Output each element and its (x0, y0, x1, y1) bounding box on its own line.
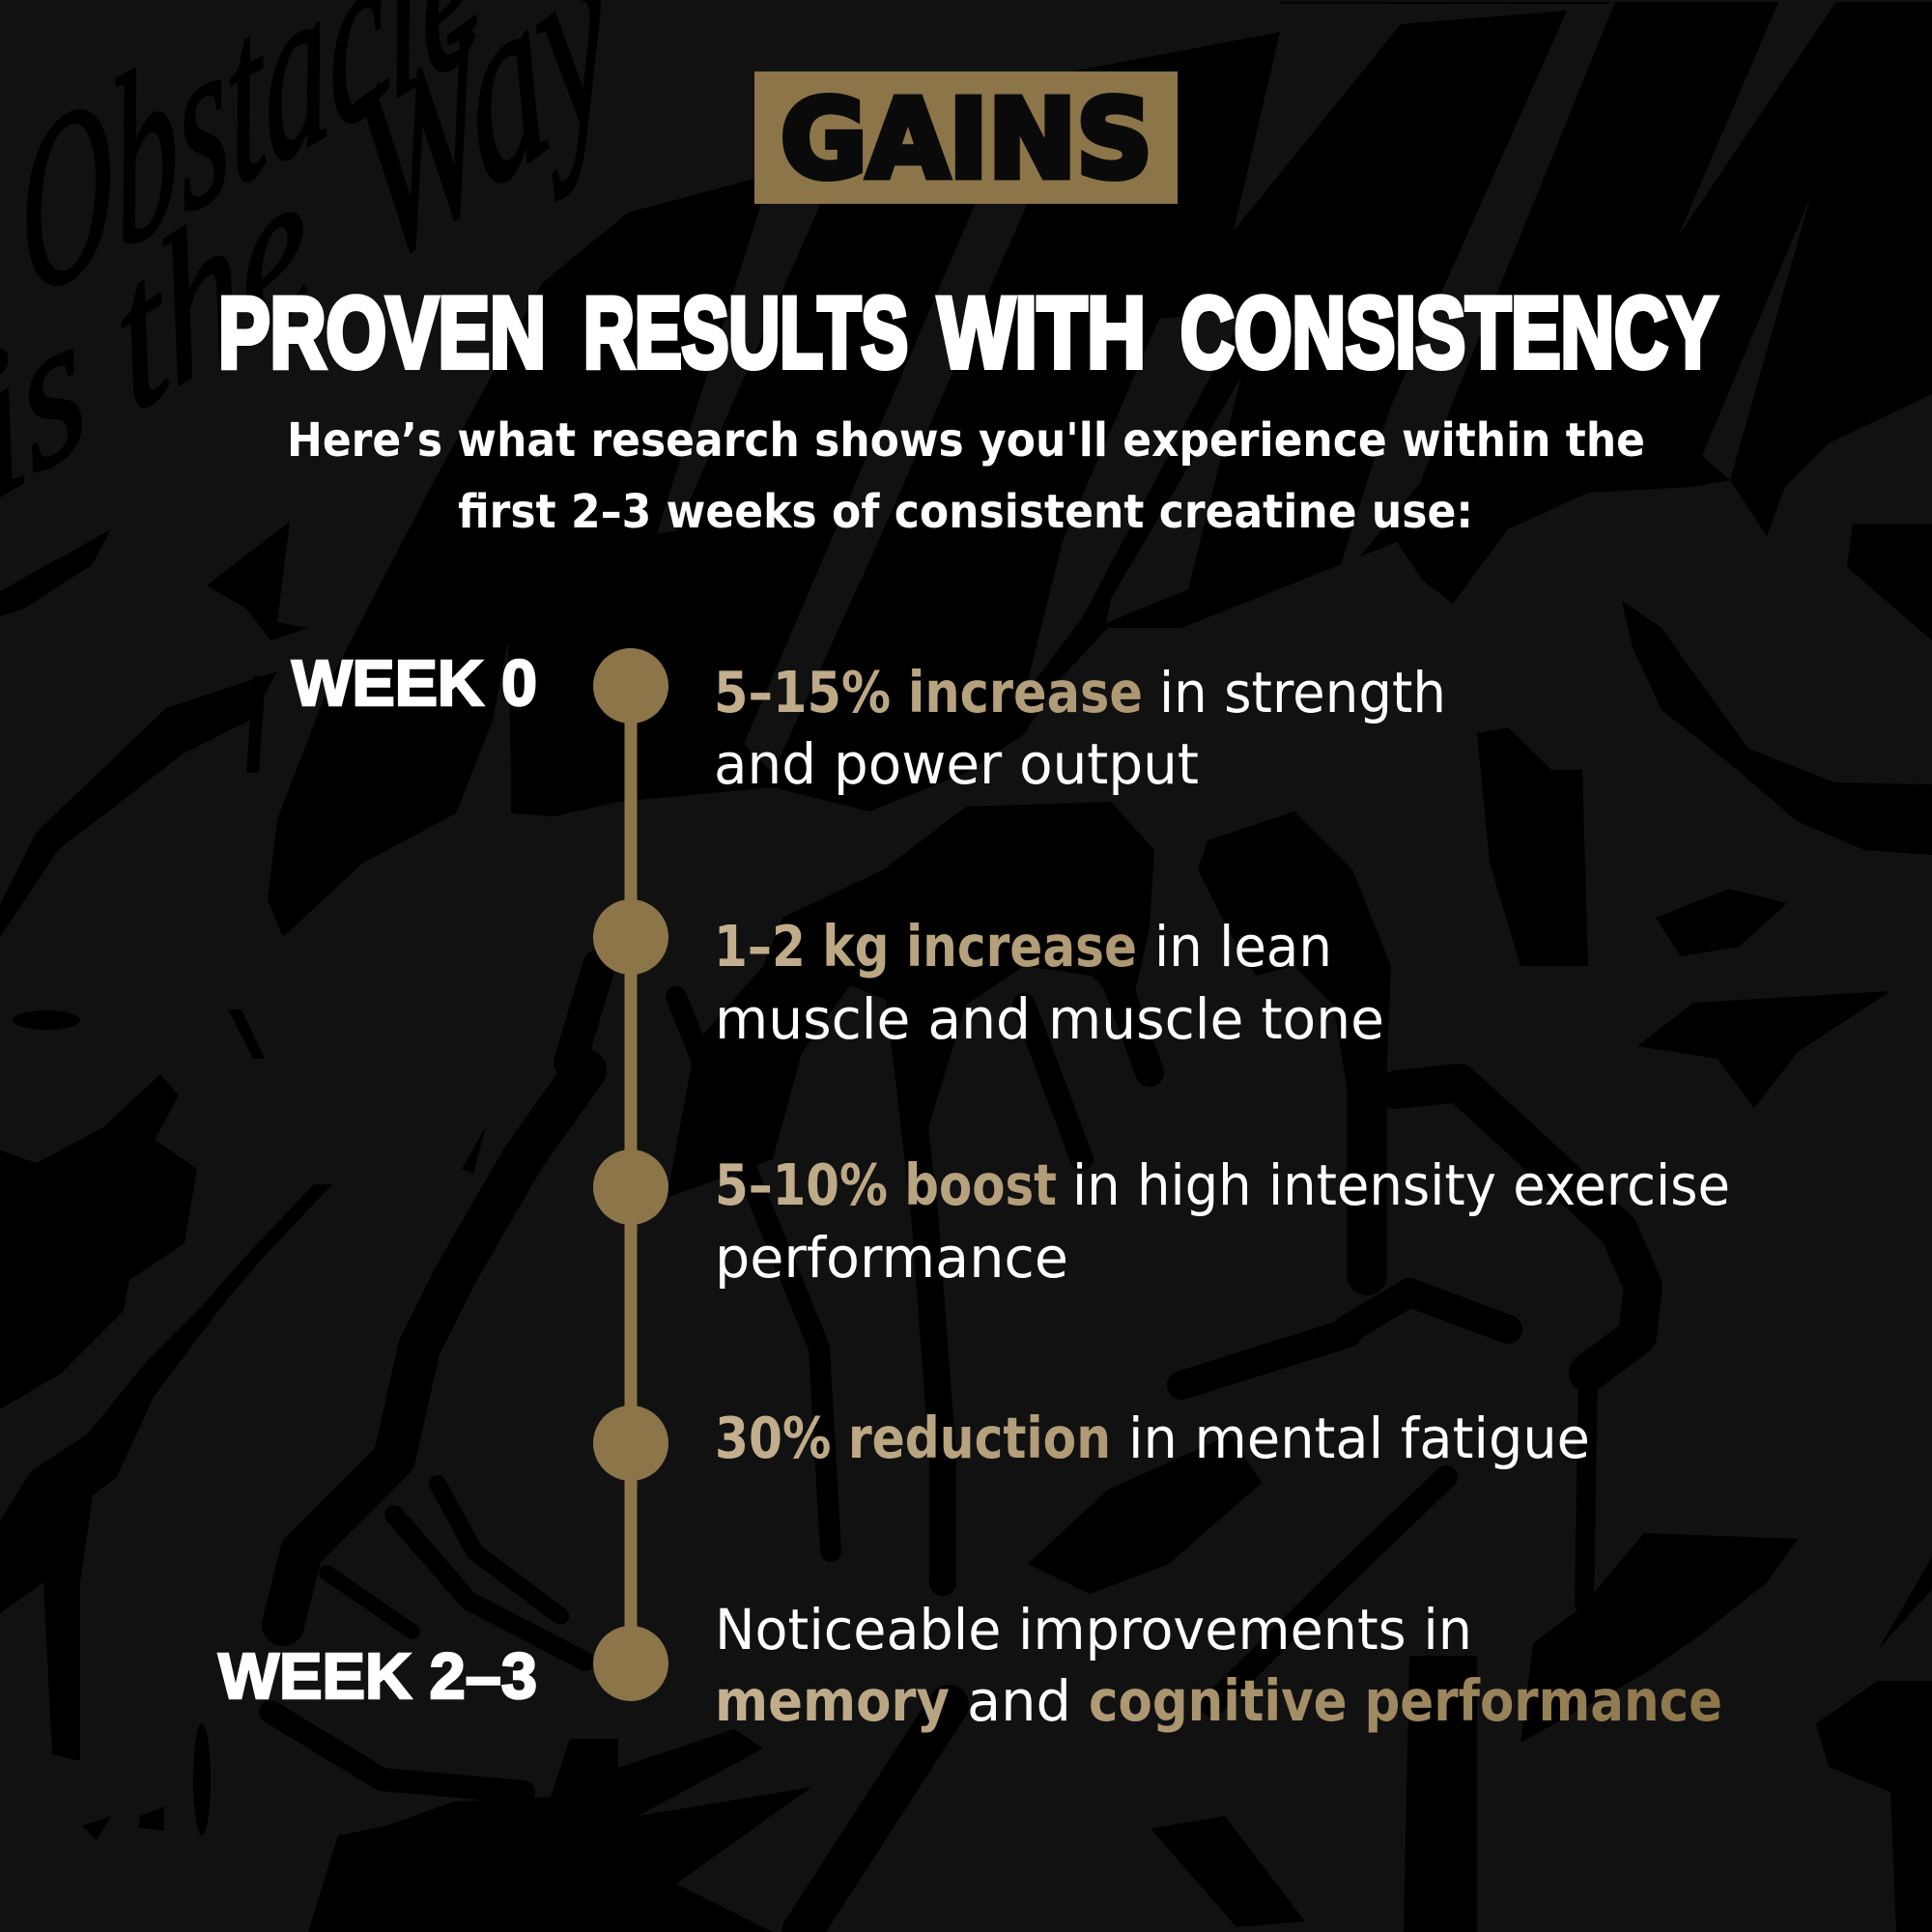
result: strength: 5–15% increase (714, 659, 1143, 725)
title: WITH (938, 277, 1146, 389)
result: lean muscle: 1–2 kg increase (714, 913, 1137, 980)
title: RESULTS (583, 277, 908, 389)
title (218, 277, 1718, 389)
intro text (287, 413, 1645, 539)
result: lean muscle (714, 913, 1384, 1052)
result: memory and cognition: Noticeable improvements in (715, 1597, 1472, 1662)
result: memory and cognition (715, 1597, 1722, 1734)
result: memory and cognition: cognitive performance (1089, 1667, 1722, 1734)
timeline (593, 648, 668, 1701)
intro text: first 2–3 weeks of consistent creatine use: (458, 485, 1473, 539)
light region at top left above the mass (0, 0, 1280, 908)
result: strength (714, 659, 1446, 797)
result: exercise performance: performance (715, 1225, 1068, 1291)
result: lean muscle: in lean (1154, 914, 1332, 980)
large diagonal brush mass (0, 2, 1932, 937)
logo: GAINS: GAINS (781, 77, 1152, 203)
result: strength: and power output (714, 731, 1199, 797)
result: exercise performance: in high intensity exercise (1072, 1152, 1730, 1218)
result: exercise performance: 5–10% boost (715, 1151, 1057, 1218)
right side shapes (1847, 524, 1932, 640)
label: week 2-3: WEEK 2–3 (218, 1640, 537, 1713)
result: memory and cognition: memory (715, 1667, 950, 1734)
light diagonal streaks (657, 0, 1837, 773)
script lettering (0, 0, 633, 546)
hump shapes around timeline (667, 802, 1154, 1198)
label: week 0: WEEK 0 (292, 647, 537, 720)
central branches (270, 966, 1643, 1932)
title: CONSISTENCY (1180, 277, 1718, 389)
result: lean muscle: muscle and muscle tone (715, 986, 1384, 1052)
left side splashes (0, 529, 111, 616)
result: mental fatigue (715, 1405, 1590, 1471)
result: exercise performance (715, 1151, 1730, 1291)
result: strength: in strength (1159, 660, 1446, 725)
result: mental fatigue: 30% reduction (715, 1405, 1111, 1471)
title: PROVEN (218, 277, 546, 389)
result: mental fatigue: in mental fatigue (1128, 1406, 1590, 1471)
bottom brush (308, 1729, 811, 1932)
result: memory and cognition: and (967, 1668, 1071, 1734)
intro text: Here’s what research shows you'll experience within the (287, 413, 1645, 468)
